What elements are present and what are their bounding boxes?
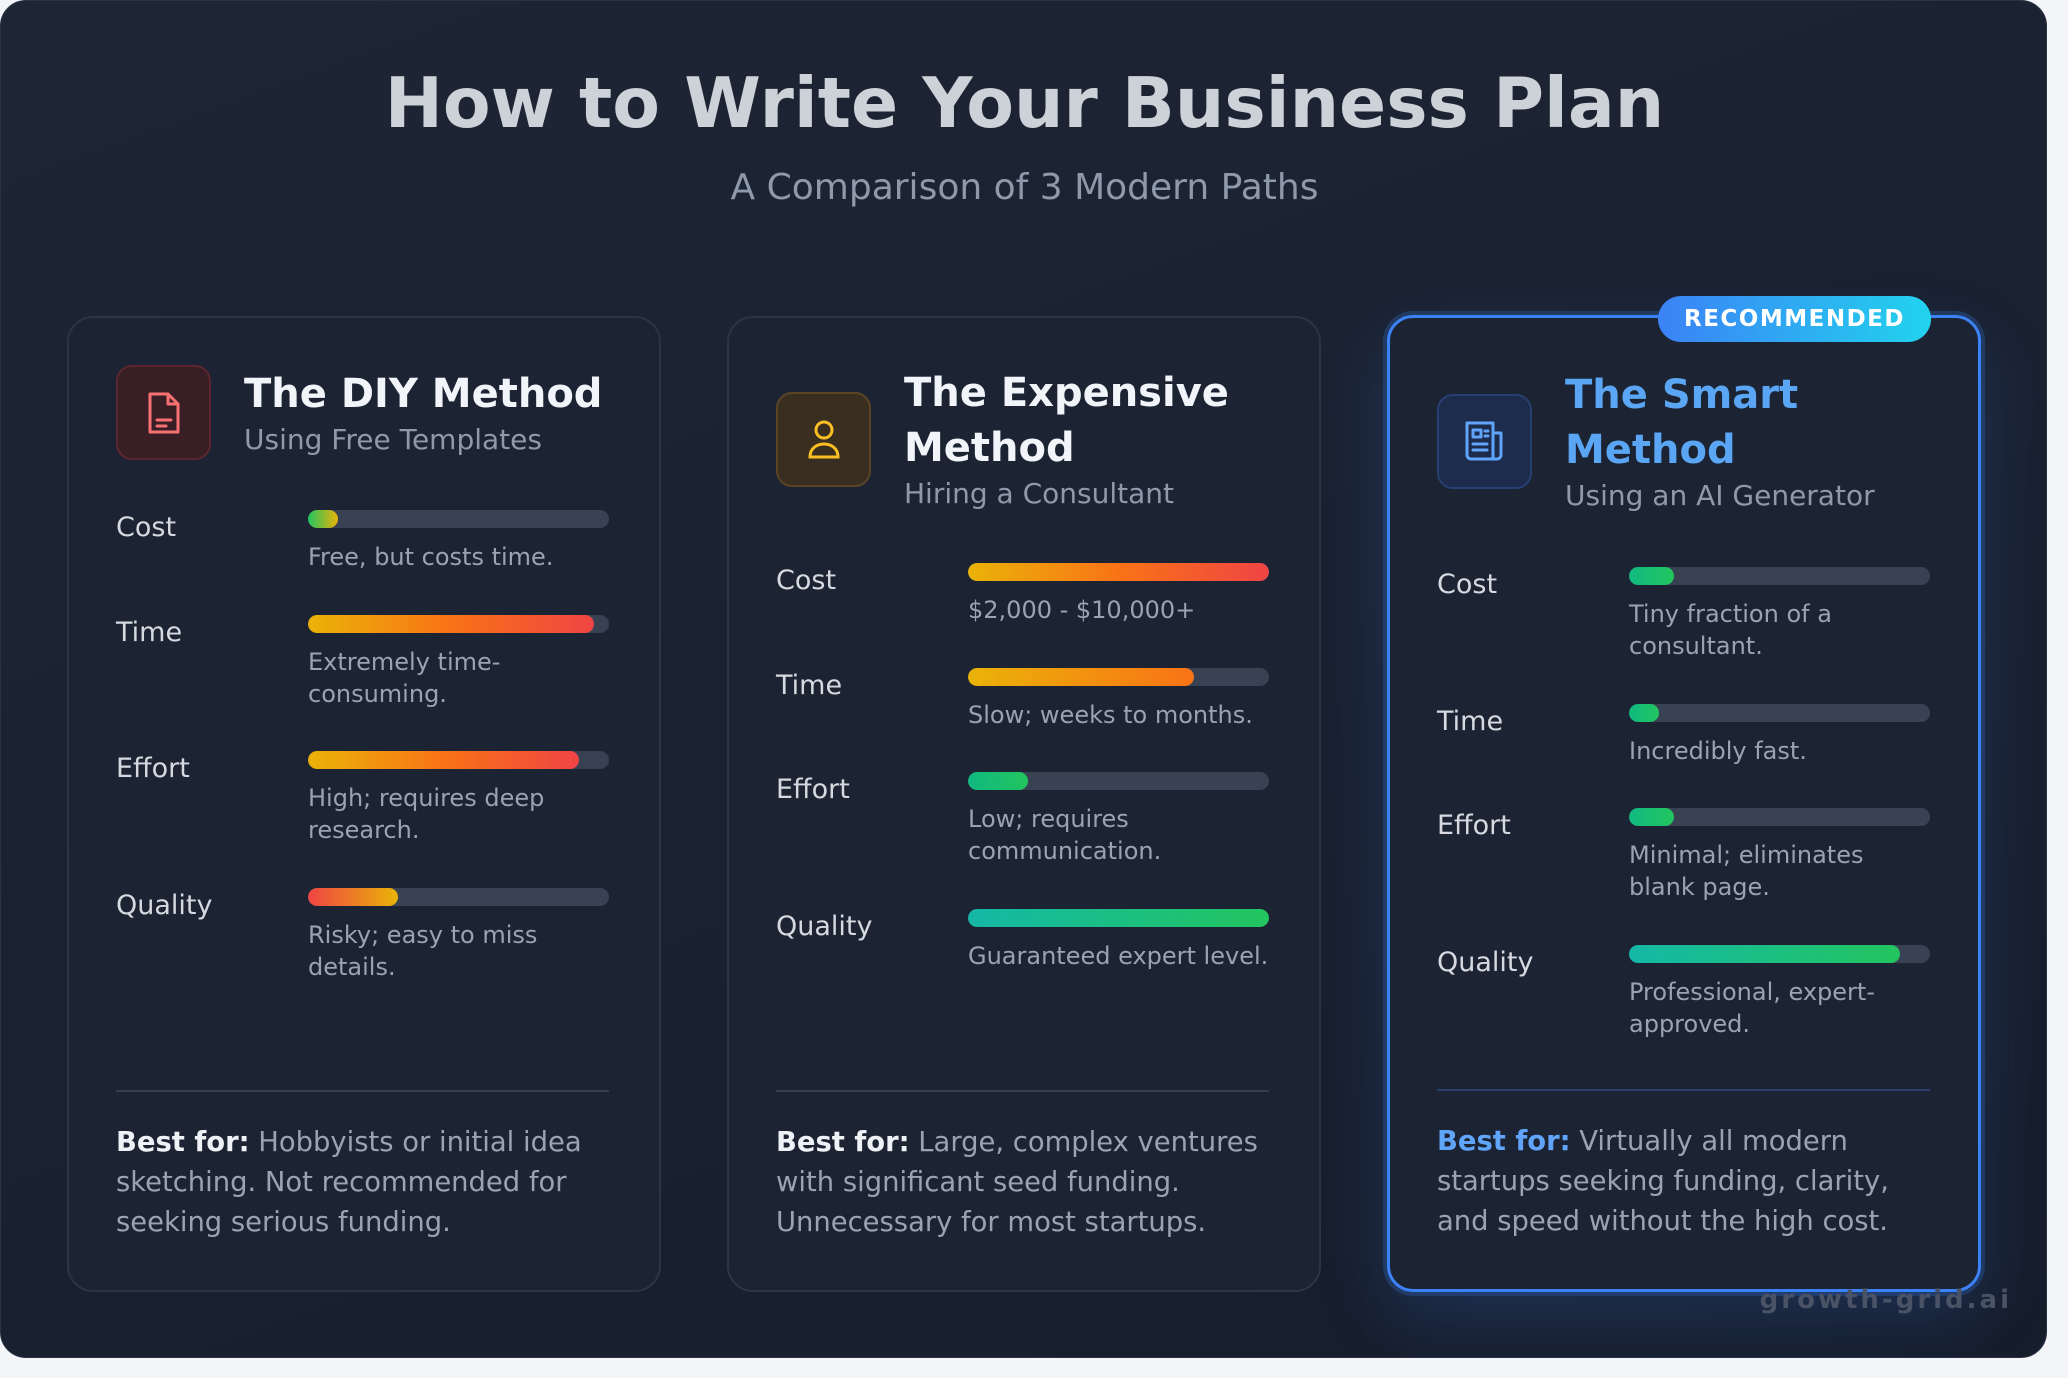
header: Expensive bbox=[776, 370, 1229, 510]
metrics: DIY: Quality bbox=[116, 890, 212, 920]
icon: person bbox=[776, 392, 871, 486]
metrics: Smart: Tiny fraction of a consultant. bbox=[1629, 600, 1832, 660]
best for: Expensive: Best for: Large, complex ventures with significant seed funding. Unnecessary for most startups. bbox=[776, 1127, 1258, 1238]
metrics: Smart: Professional, expert-approved. bbox=[1629, 978, 1875, 1038]
metrics: Expensive: Low; requires communication. bbox=[968, 805, 1161, 865]
metrics: Smart: Time bbox=[1437, 706, 1503, 736]
panel: Smart method bbox=[1387, 315, 1981, 1292]
metrics: DIY: Risky; easy to miss details. bbox=[308, 920, 537, 980]
panel: Expensive method bbox=[727, 316, 1321, 1292]
metrics: Smart: Incredibly fast. bbox=[1629, 736, 1807, 764]
metrics: DIY: High; requires deep research. bbox=[308, 784, 544, 844]
subtitle: A Comparison of 3 Modern Paths bbox=[731, 167, 1318, 208]
badge: recommended bbox=[1658, 296, 1931, 342]
header: DIY: Using Free Templates bbox=[244, 423, 542, 456]
header: Smart bbox=[1437, 372, 1875, 512]
metrics: Expensive: Effort bbox=[776, 774, 850, 805]
best for: Smart bbox=[1437, 1089, 1930, 1242]
metrics: Expensive: Cost bbox=[776, 565, 836, 596]
metrics: Expensive: Guaranteed expert level. bbox=[968, 942, 1268, 970]
metrics: Expensive: $2,000 - $10,000+ bbox=[968, 596, 1195, 624]
metrics: DIY: Cost bbox=[116, 512, 176, 543]
metrics: DIY bbox=[116, 510, 609, 980]
metrics: DIY: Effort bbox=[116, 753, 190, 784]
panel: DIY method bbox=[67, 316, 661, 1292]
best for: DIY: Best for: Hobbyists or initial idea sketching. Not recommended for seeking serious funding. bbox=[116, 1127, 582, 1238]
header: DIY: The DIY Method bbox=[244, 371, 602, 417]
metrics: Expensive bbox=[776, 563, 1269, 970]
header: Smart: Using an AI Generator bbox=[1565, 479, 1875, 512]
metrics: DIY: Time bbox=[116, 616, 182, 648]
metrics: Smart: Effort bbox=[1437, 810, 1511, 841]
metrics: Smart: blank page. bbox=[1629, 873, 1770, 901]
metrics: Smart bbox=[1436, 567, 1930, 1038]
header: Expensive: The Expensive bbox=[904, 370, 1229, 416]
header: Smart: The Smart bbox=[1565, 372, 1798, 418]
metrics: Smart: Quality bbox=[1437, 946, 1533, 978]
metrics: Expensive: Quality bbox=[776, 910, 872, 942]
metrics: DIY: Extremely time-consuming. bbox=[308, 648, 500, 708]
metrics: Expensive: Time bbox=[776, 670, 842, 700]
icon: document bbox=[116, 365, 211, 460]
header: Smart: Method bbox=[1565, 427, 1736, 473]
metrics: DIY: Free, but costs time. bbox=[308, 543, 553, 571]
title: How to Write Your Business Plan bbox=[385, 63, 1664, 144]
metrics: Smart: Cost bbox=[1437, 569, 1497, 600]
best for: DIY bbox=[116, 1090, 609, 1243]
best for: Smart: Best for: Virtually all modern startups seeking funding, clarity, and speed without the high cost. bbox=[1437, 1126, 1889, 1237]
metrics: Expensive: Slow; weeks to months. bbox=[968, 700, 1253, 728]
header: DIY bbox=[116, 365, 602, 460]
metrics: Smart: Minimal; eliminates bbox=[1629, 841, 1863, 869]
icon: newspaper bbox=[1437, 394, 1532, 488]
badge: recommended: RECOMMENDED bbox=[1684, 306, 1905, 332]
watermark: growth-grid.ai bbox=[1760, 1285, 2012, 1315]
header: Expensive: Hiring a Consultant bbox=[904, 477, 1174, 510]
header: Expensive: Method bbox=[904, 425, 1075, 471]
